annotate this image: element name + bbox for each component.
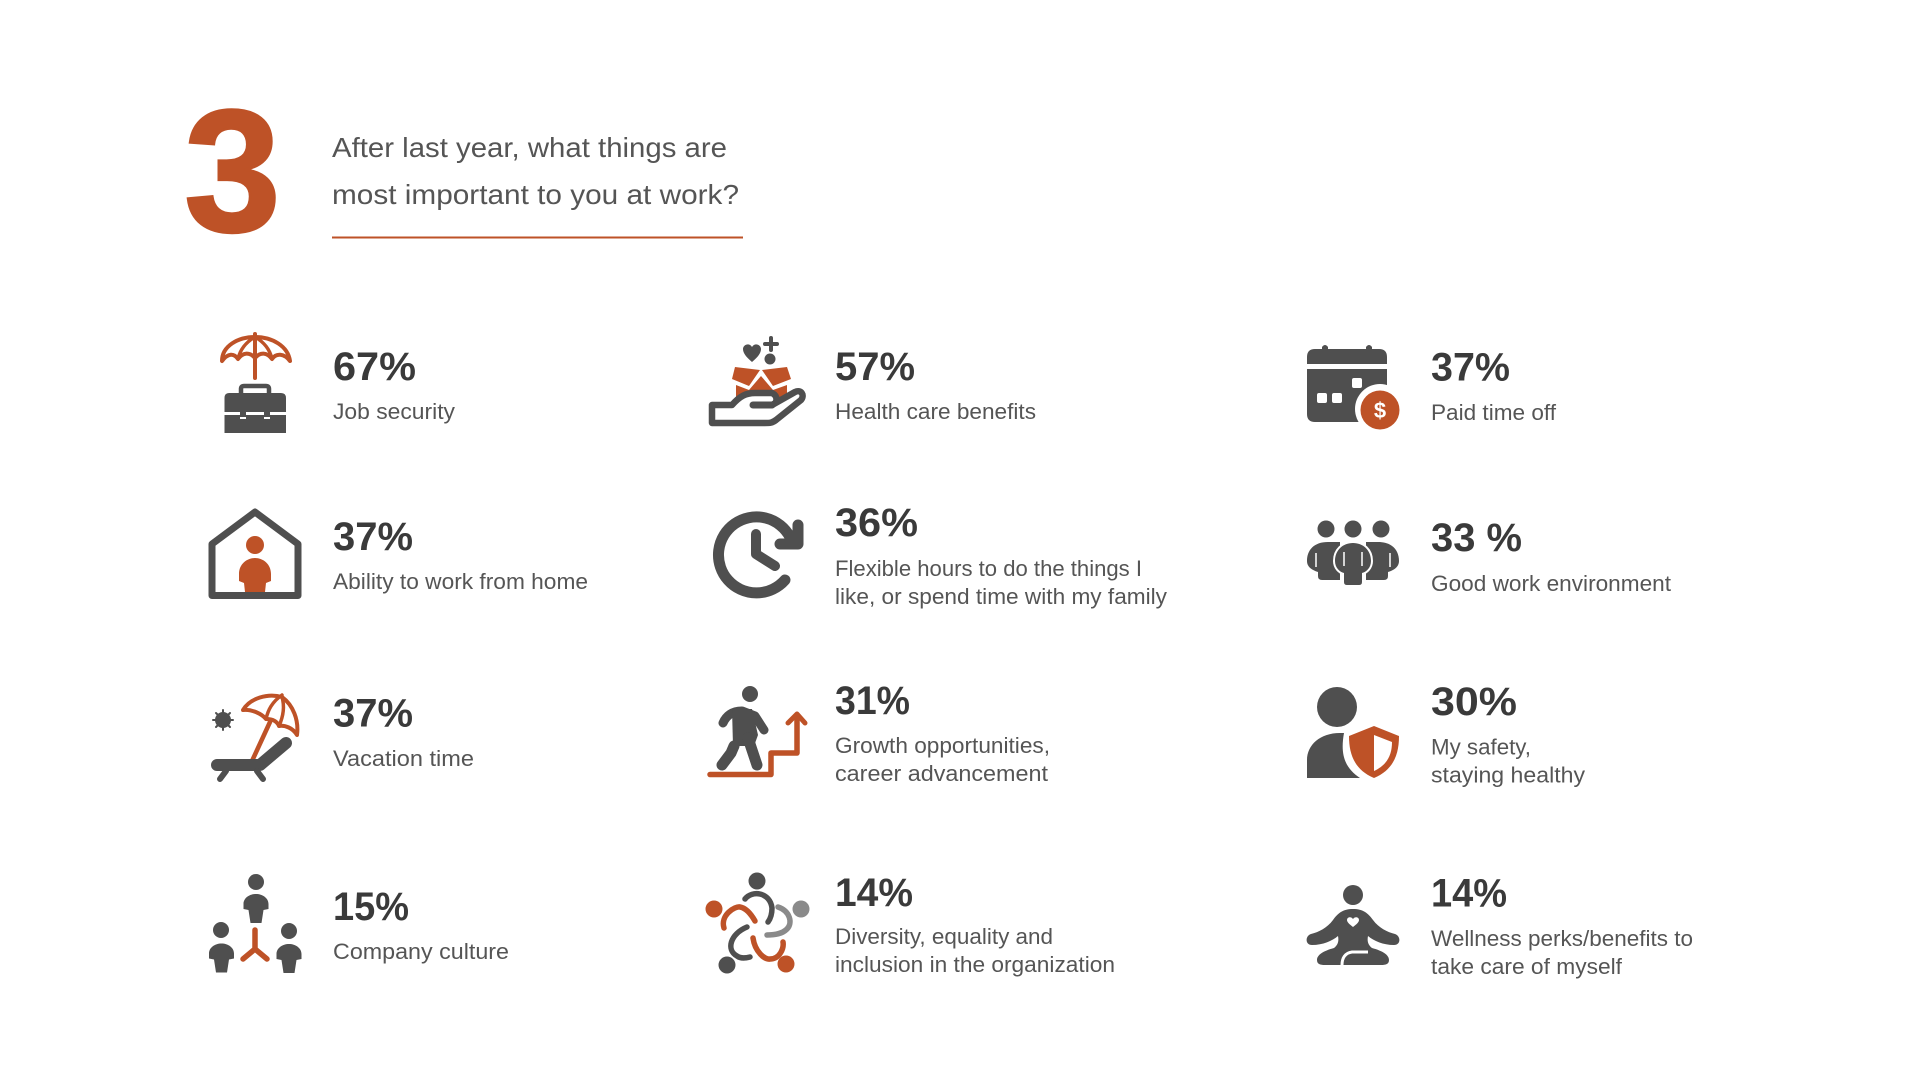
icon: calendar with dollar coin: $ [1374, 398, 1386, 423]
item: good work environment [1307, 516, 1671, 596]
label: good work environment: Good work environment [1431, 571, 1671, 596]
item: company culture [209, 874, 509, 973]
icon: meditating person [1307, 885, 1399, 965]
label: flexible hours: like, or spend time with my family [835, 584, 1167, 609]
icon: person in house [212, 512, 298, 596]
icon: three people [1307, 520, 1399, 585]
item: vacation time [213, 692, 474, 779]
big number 3: 3 [184, 73, 281, 268]
stat: 37%: 37% [1431, 346, 1510, 390]
item: ability to work from home [212, 512, 588, 596]
item: health care benefits [712, 338, 1036, 424]
heading: After last year, what things are [332, 132, 727, 163]
icon: hand holding box [712, 338, 803, 423]
stat: 30%: 30% [1431, 680, 1517, 724]
label: growth opportunities [835, 733, 1050, 786]
stat: 14%: 14% [835, 871, 913, 915]
icon: umbrella over briefcase [222, 334, 290, 433]
label: wellness perks [1431, 926, 1693, 979]
stat: 67%: 67% [333, 345, 416, 389]
label: paid time off: Paid time off [1431, 400, 1557, 425]
icon: person with shield [1307, 687, 1399, 778]
item: growth opportunities [710, 679, 1050, 786]
heading [332, 132, 739, 210]
label: job security: Job security [333, 399, 455, 424]
label: flexible hours: Flexible hours to do the things I [835, 556, 1142, 581]
item: job security [222, 334, 455, 433]
item: flexible hours [718, 501, 1167, 609]
icon: clock with arrow [718, 517, 798, 593]
label: vacation time: Vacation time [333, 746, 474, 771]
heading underline [332, 236, 743, 238]
stat: 31%: 31% [835, 679, 910, 723]
label: company culture: Company culture [333, 939, 509, 964]
stat: 37%: 37% [333, 692, 413, 736]
icon: person walking up stairs [710, 686, 805, 774]
label: health care benefits: Health care benefits [835, 399, 1036, 424]
label: diversity, equality and inclusion: Diversity, equality and [835, 924, 1053, 949]
label: my safety: My safety, [1431, 734, 1531, 760]
label: growth opportunities: Growth opportunities, [835, 733, 1050, 758]
item: paid time off [1307, 345, 1557, 434]
item: wellness perks [1307, 872, 1693, 979]
stat: 15%: 15% [333, 885, 409, 929]
label: my safety [1431, 734, 1585, 788]
label: diversity, equality and inclusion: inclusion in the organization [835, 952, 1115, 977]
label: diversity, equality and inclusion [835, 924, 1115, 977]
stat: 57%: 57% [835, 345, 915, 389]
stat: 36%: 36% [835, 501, 918, 545]
item: my safety [1307, 680, 1585, 788]
label: wellness perks: take care of myself [1431, 954, 1623, 979]
label: wellness perks: Wellness perks/benefits to [1431, 926, 1693, 951]
icon: calendar with dollar coin [1307, 345, 1405, 434]
label: my safety: staying healthy [1431, 762, 1585, 788]
item: diversity, equality and inclusion [706, 871, 1115, 977]
label: growth opportunities: career advancement [835, 761, 1048, 786]
stat: 33 %: 33 % [1431, 516, 1522, 560]
stat: 37%: 37% [333, 515, 413, 559]
stat: 14%: 14% [1431, 872, 1507, 916]
label: flexible hours [835, 556, 1167, 609]
label: ability to work from home: Ability to work from home [333, 569, 588, 594]
icon: five people in a circle [706, 872, 810, 974]
icon: three people with connector [209, 874, 302, 973]
heading: most important to you at work? [332, 179, 739, 210]
icon: beach lounger and umbrella [213, 695, 297, 779]
